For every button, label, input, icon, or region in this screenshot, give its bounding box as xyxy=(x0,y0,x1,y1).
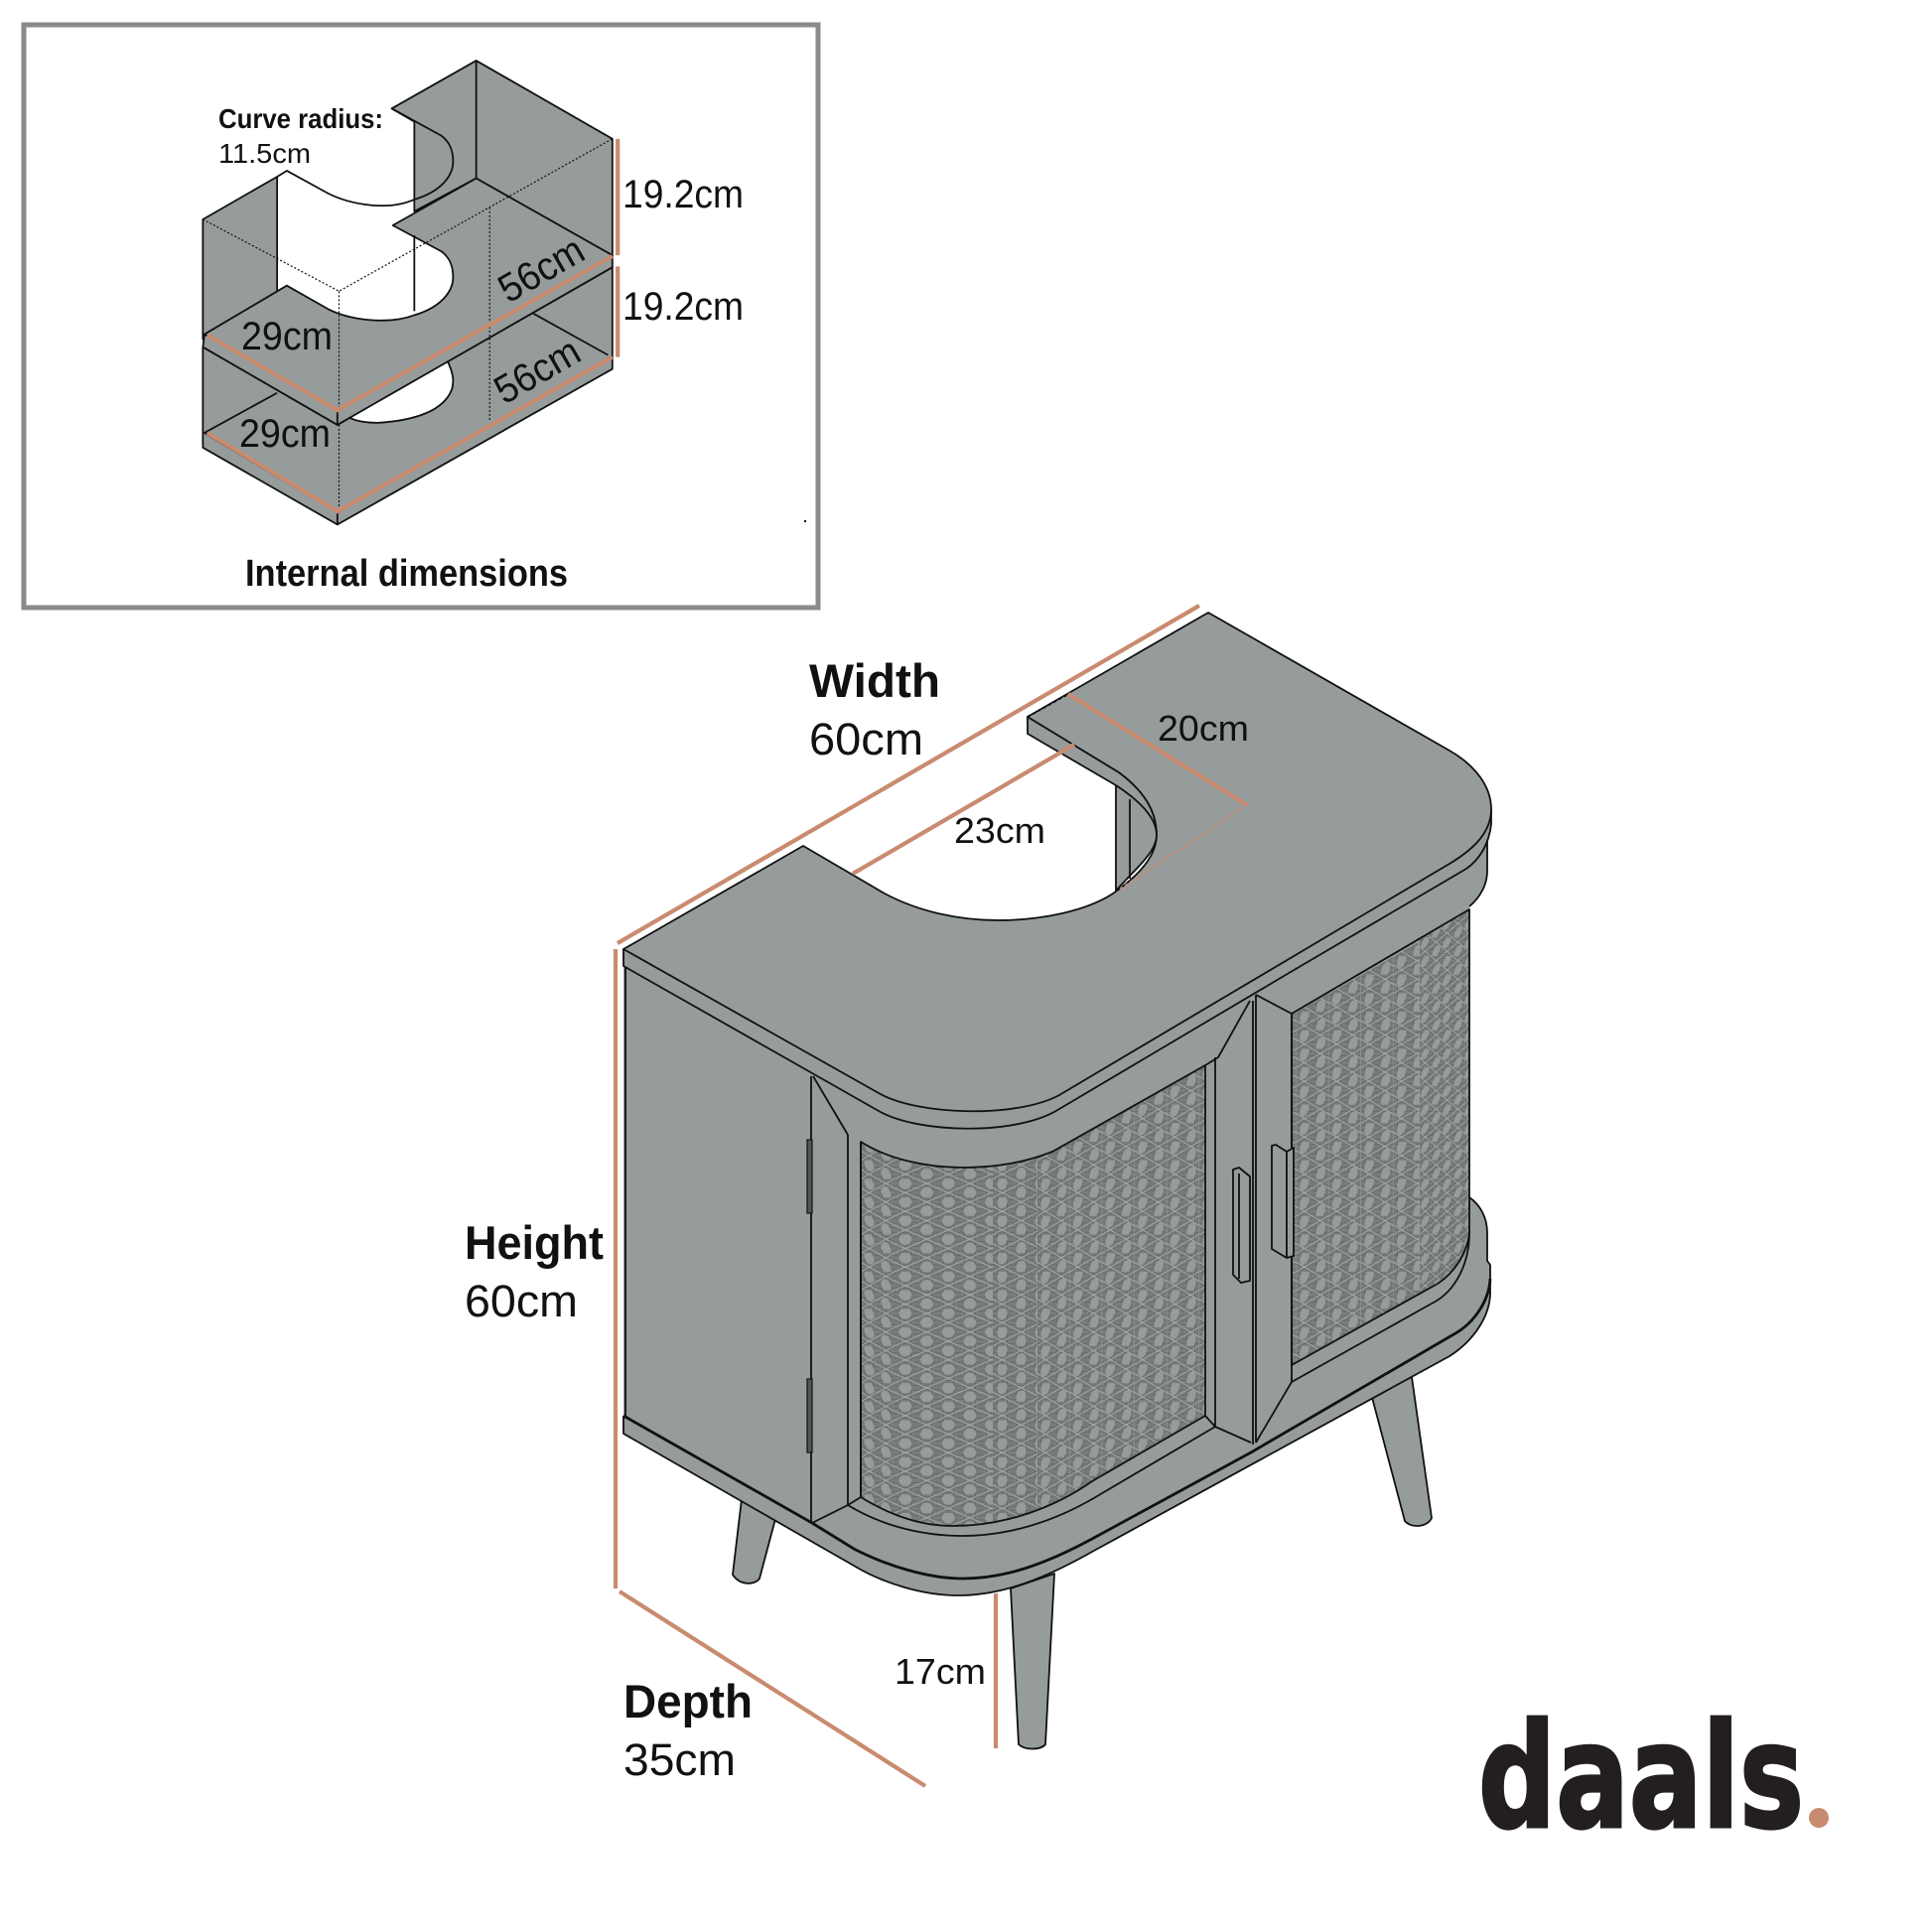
leg: back left xyxy=(733,1499,775,1584)
hinge: lower xyxy=(807,1379,812,1452)
label: depth value: 35cm xyxy=(623,1734,736,1785)
measure line: height xyxy=(614,949,618,1588)
diagram: internal shelves xyxy=(203,61,618,524)
label: notch width value: 20cm xyxy=(1158,708,1249,749)
label: lower depth: 29cm xyxy=(239,412,331,456)
measure line: notch depth xyxy=(853,745,1074,874)
label: 11.5cm: 11.5cm xyxy=(218,138,311,169)
leg: front xyxy=(1011,1574,1054,1749)
label: lower height: 19.2cm xyxy=(622,285,744,329)
measure line: width xyxy=(618,606,1199,943)
label: lower width: 56cm xyxy=(486,330,588,413)
label: height value: 60cm xyxy=(465,1276,578,1326)
label: depth: Depth xyxy=(623,1675,753,1727)
door frame lines xyxy=(623,909,1490,1579)
top plate face xyxy=(623,613,1491,1111)
label: width value: 60cm xyxy=(809,714,923,764)
leg: back right xyxy=(1370,1370,1432,1526)
label: upper height: 19.2cm xyxy=(622,173,744,216)
cane panel: left door xyxy=(861,1052,1206,1529)
panel caption: Internal dimensions xyxy=(245,553,568,595)
measure line: leg height xyxy=(994,1593,998,1748)
logo: daals: daals xyxy=(1478,1693,1804,1862)
label: upper depth: 29cm xyxy=(241,315,333,358)
label: width: Width xyxy=(809,654,940,707)
hinge: upper xyxy=(807,1140,812,1213)
label: height: Height xyxy=(465,1216,604,1269)
panel: internal dimensions xyxy=(24,25,818,608)
measure line: depth xyxy=(620,1591,925,1786)
handle: right door xyxy=(1272,1145,1294,1258)
cabinet body xyxy=(623,839,1490,1595)
stray dot xyxy=(804,520,806,522)
panel frame xyxy=(24,25,818,608)
handle: left door xyxy=(1233,1168,1250,1283)
top plate edge xyxy=(623,809,1491,1129)
measure line: notch width xyxy=(1028,694,1247,891)
body outlines xyxy=(623,839,1490,1595)
illustration: cabinet xyxy=(623,613,1491,1749)
notch inner wall xyxy=(1028,717,1157,891)
label: notch depth value: 23cm xyxy=(954,810,1045,851)
label: curve radius: Curve radius: xyxy=(218,103,383,134)
label: upper width: 56cm xyxy=(490,228,592,312)
label: leg height value: 17cm xyxy=(895,1651,986,1692)
cane panel: right door xyxy=(1292,903,1469,1370)
